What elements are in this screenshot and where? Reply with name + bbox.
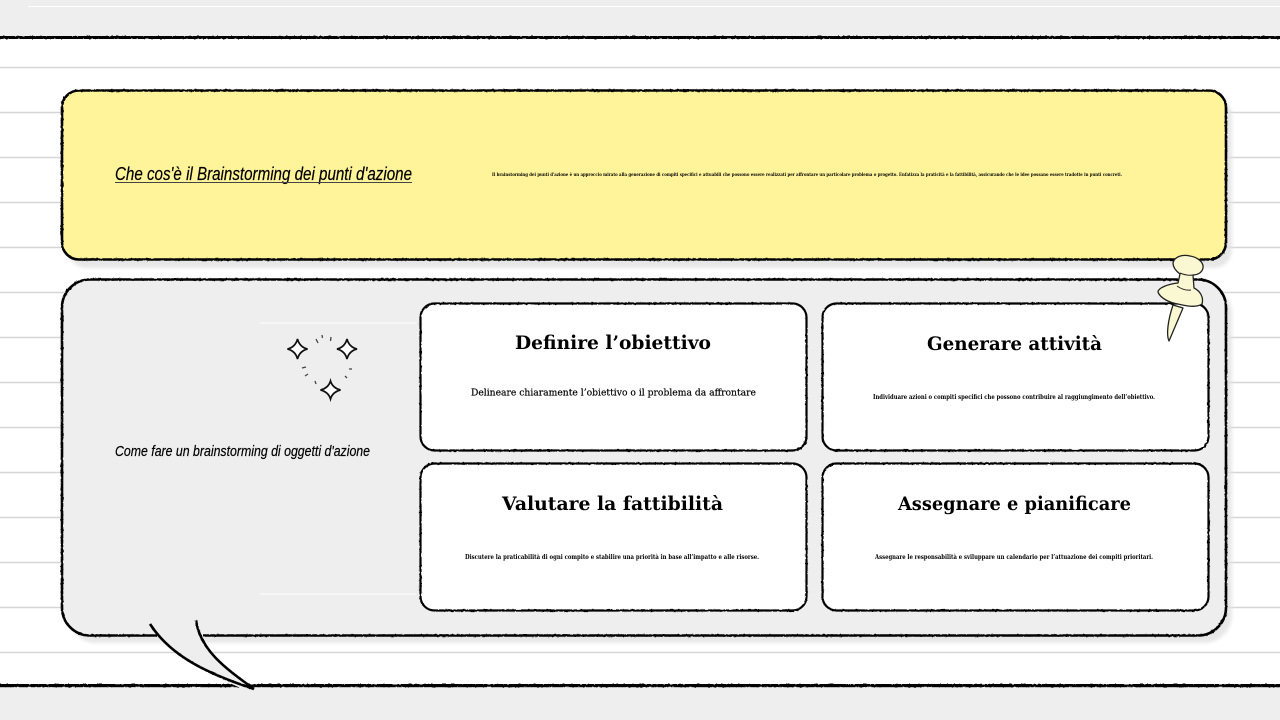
card text: Delineare chiaramente l’obiettivo o il problema da affrontare [471,388,756,398]
card title: Valutare la fattibilità [501,493,723,515]
heading: what is it: Che cos'è il Brainstorming dei punti d'azione [115,164,412,184]
panel: how to [62,280,1232,692]
card: define objective [420,304,806,450]
panel: what is it [62,90,1232,268]
speech bubble tail [150,620,256,692]
card title: Definire l’obiettivo [515,332,711,354]
left caption: Come fare un brainstorming di oggetti d'azione [115,443,370,460]
card: generate tasks [822,304,1208,450]
card: assign and plan [822,464,1208,610]
card title: Generare attività [927,333,1102,355]
icon: push pin [1158,255,1203,341]
card title: Assegnare e pianificare [897,493,1131,515]
card text: Assegnare le responsabilità e sviluppare un calendario per l’attuazione dei compiti prioritari. [874,554,1153,561]
card text: Individuare azioni o compiti specifici che possono contribuire al raggiungimento dell’obiettivo. [873,394,1155,401]
icon: sparkles [288,335,357,399]
description text: Il brainstorming dei punti d'azione è un approccio mirato alla generazione di compiti specifici e attuabili che possono essere realizzati per affrontare un particolare problema o progetto. Enfatizza la praticità e la fattibilità, assicurando che le idee possano essere tradotte in punti concreti. [492,171,1122,178]
top notebook band [0,0,1280,39]
card: evaluate feasibility [420,464,806,610]
card text: Discutere la praticabilità di ogni compito e stabilire una priorità in base all’impatto e alle risorse. [465,554,759,561]
bottom notebook band [0,684,1280,720]
